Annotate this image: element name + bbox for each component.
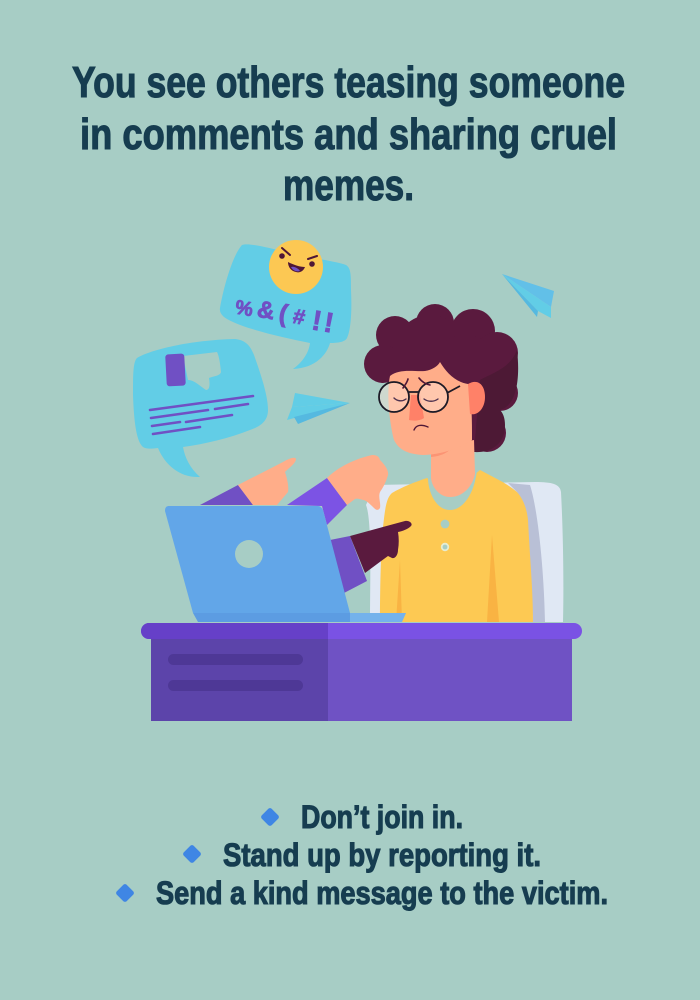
hair xyxy=(364,304,518,452)
neck xyxy=(431,440,475,497)
nose xyxy=(409,395,424,421)
glasses xyxy=(379,382,460,412)
title: memes. xyxy=(283,161,414,210)
symbols: ! xyxy=(310,305,324,337)
speech bubble: angry symbols xyxy=(220,240,351,369)
bullet three: Send a kind message to the victim. xyxy=(156,875,608,911)
arm: thumbs down hand xyxy=(287,455,388,525)
laptop xyxy=(165,506,406,622)
symbols: # xyxy=(291,305,307,330)
symbols xyxy=(233,296,336,339)
bullet list xyxy=(115,799,608,911)
bullet one: Don’t join in. xyxy=(301,799,463,835)
symbols: % xyxy=(233,296,255,321)
arm: pointing peach hand xyxy=(200,458,296,505)
symbols: & xyxy=(255,296,277,325)
icon: thumbs down xyxy=(165,352,221,390)
arm: pointing dark hand xyxy=(330,521,412,593)
icon: angry emoji xyxy=(269,240,323,294)
icon: paper plane right xyxy=(502,274,554,318)
chair xyxy=(366,482,563,622)
eyes, brows, mouth xyxy=(394,378,438,430)
sweater buttons xyxy=(441,520,449,551)
ear xyxy=(468,382,485,414)
speech bubble: thumbs down xyxy=(133,339,268,477)
collar xyxy=(428,470,477,510)
sweater xyxy=(380,470,533,622)
face xyxy=(388,362,472,455)
symbols: ( xyxy=(277,299,291,328)
person xyxy=(364,304,533,622)
title xyxy=(72,58,625,210)
text lines xyxy=(150,396,253,434)
bullet two: Stand up by reporting it. xyxy=(223,837,541,873)
bullet one xyxy=(260,799,463,835)
icon: paper plane left xyxy=(287,393,350,424)
desk xyxy=(141,623,582,721)
symbols: ! xyxy=(322,307,336,339)
illustration xyxy=(133,240,582,721)
